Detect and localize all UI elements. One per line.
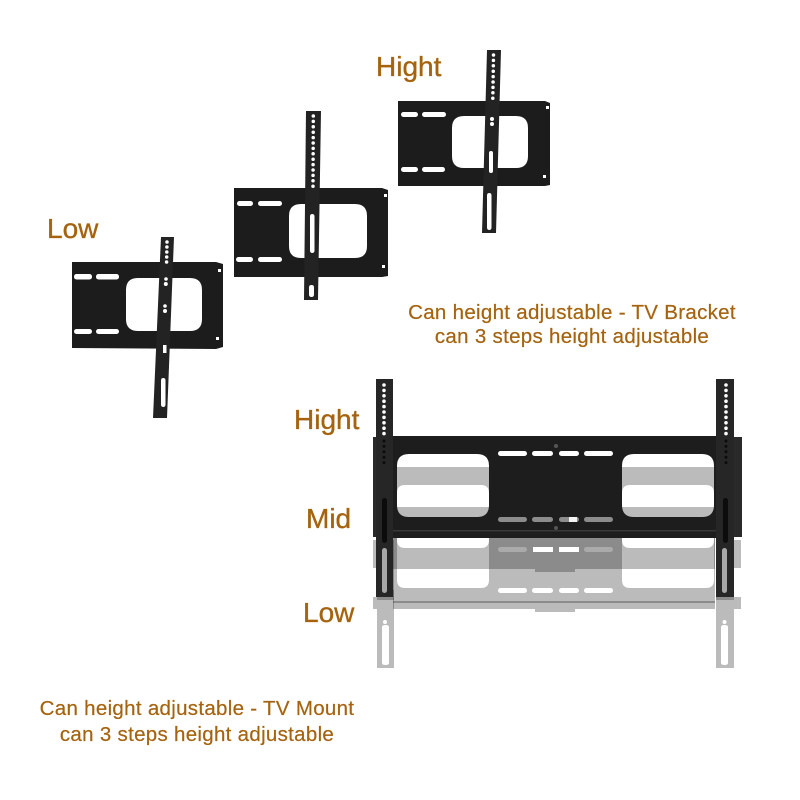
caption: TV mount: can 3 steps height adjustable	[60, 723, 334, 746]
label: Low (main): Low	[303, 597, 355, 628]
caption: TV bracket: Can height adjustable - TV Bracket	[408, 301, 736, 324]
caption: TV bracket	[408, 301, 736, 348]
ghost slots	[383, 547, 726, 624]
caption: TV mount: Can height adjustable - TV Mount	[40, 697, 354, 720]
bracket: low position	[72, 237, 223, 418]
label: Hight (main): Hight	[294, 404, 360, 435]
caption: TV bracket: can 3 steps height adjustable	[435, 325, 709, 348]
mount: ghost low position	[373, 507, 741, 668]
label: Hight (top): Hight	[376, 51, 442, 82]
bracket: middle position	[234, 111, 388, 300]
mount: ghost middle position	[373, 467, 741, 600]
mount: main high position	[373, 379, 742, 597]
bracket: high position	[398, 50, 550, 233]
label: Mid: Mid	[306, 503, 351, 534]
label: Low (left): Low	[47, 213, 99, 244]
caption: TV mount	[40, 697, 354, 746]
